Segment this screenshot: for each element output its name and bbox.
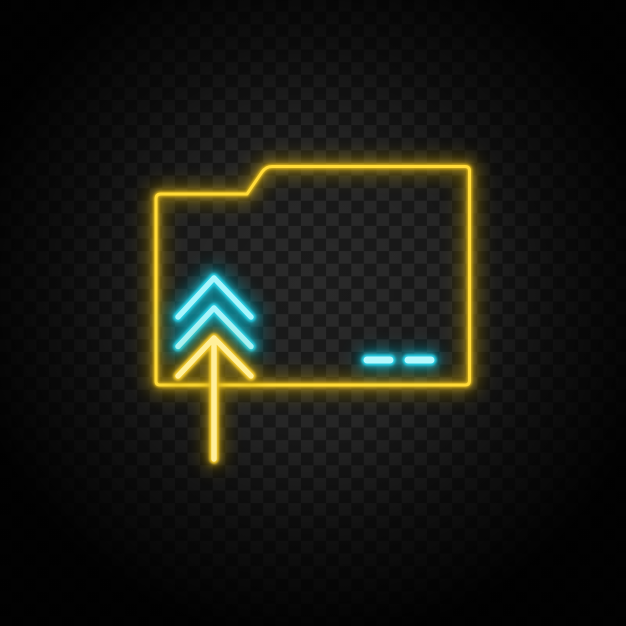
- icon: cyan dashes: [367, 359, 431, 361]
- icon: cyan upward chevrons: [178, 278, 251, 346]
- icon: neon folder outline: [156, 166, 470, 385]
- icon: yellow upload arrow: [178, 338, 251, 459]
